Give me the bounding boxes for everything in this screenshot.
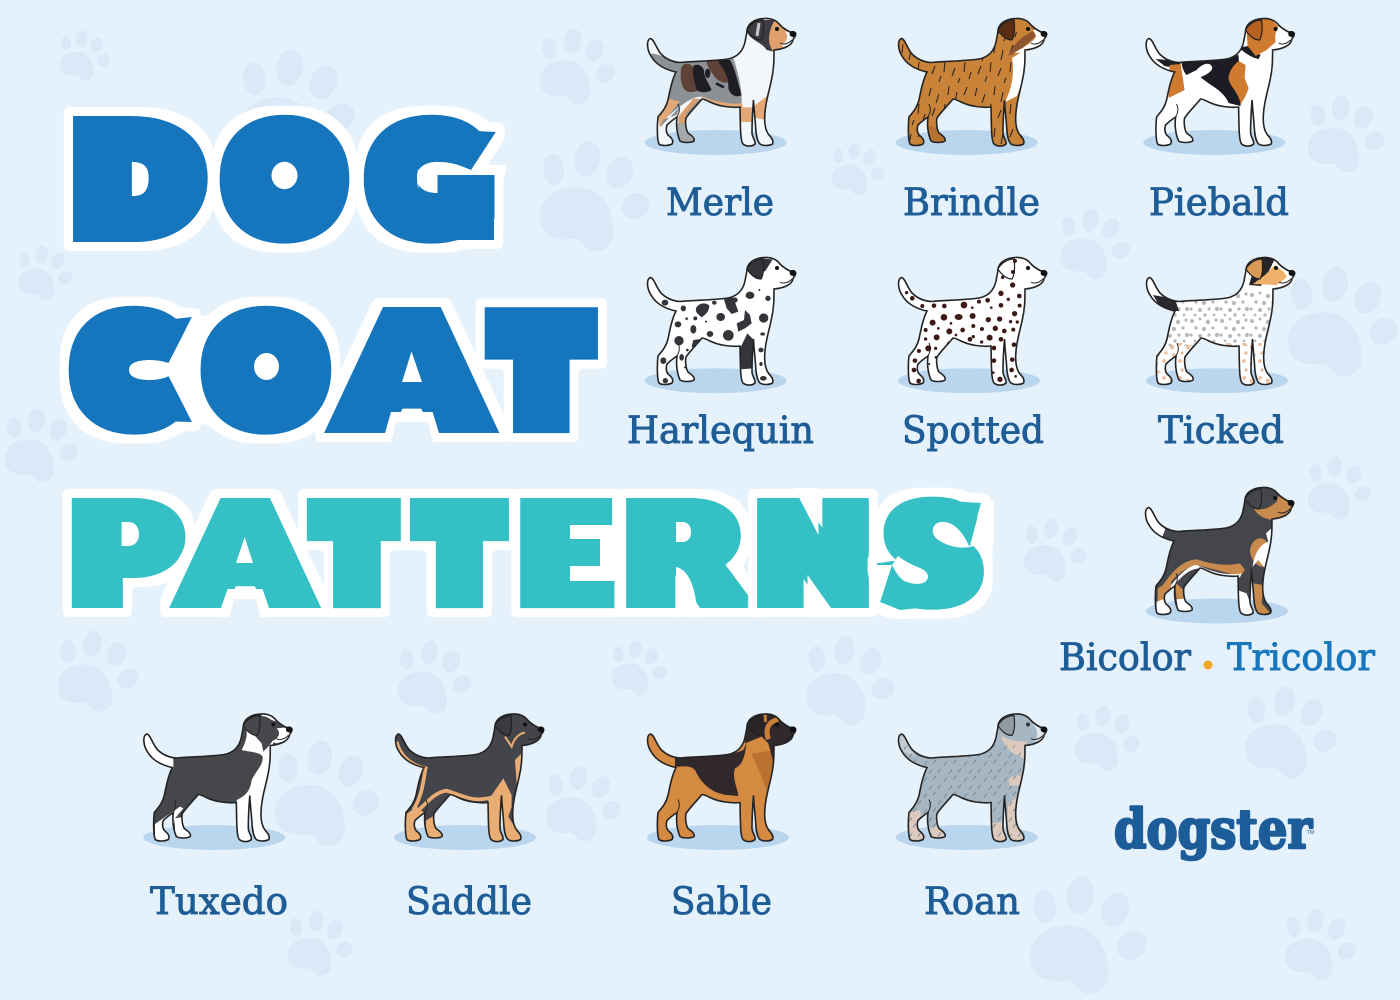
title word: PATTERNS: E — [528, 489, 604, 618]
label: Ticked: Ticked — [1158, 409, 1284, 452]
dog: merle — [643, 18, 797, 155]
title word: COAT: A — [348, 292, 476, 447]
logo: dogster: dogster — [1114, 797, 1312, 861]
title word: PATTERNS: N — [762, 484, 864, 623]
title word: PATTERNS: T — [321, 488, 393, 618]
title word: PATTERNS — [77, 483, 994, 623]
title word: DOG: O — [229, 101, 340, 257]
dog: sable — [647, 713, 797, 850]
label: Roan: Roan — [924, 880, 1020, 923]
title word: DOG — [80, 101, 512, 257]
title: DOG COAT PATTERNS — [77, 101, 994, 623]
title word: DOG: D — [80, 101, 197, 256]
dog: saddle — [394, 714, 544, 850]
dog: roan — [896, 714, 1050, 850]
title word: COAT: C — [79, 292, 183, 447]
dog: piebald — [1143, 16, 1295, 155]
dog: ticked — [1146, 257, 1295, 393]
label: Harlequin: Harlequin — [627, 409, 814, 452]
dog: brindle — [896, 18, 1048, 155]
title word: PATTERNS: R — [631, 485, 734, 622]
label: Piebald: Piebald — [1149, 181, 1289, 224]
title word: PATTERNS: T — [424, 488, 495, 618]
label: Spotted: Spotted — [902, 409, 1044, 452]
title word: DOG: G — [374, 102, 488, 257]
dog: harlequin — [645, 257, 796, 393]
label: Tricolor: Tricolor — [1227, 636, 1375, 679]
dog: tuxedo — [143, 714, 293, 850]
label: Tuxedo: Tuxedo — [150, 880, 288, 923]
dog: spotted — [898, 257, 1047, 393]
title word: PATTERNS: S — [889, 484, 976, 623]
logo: dogster: TM — [1307, 830, 1314, 836]
label: Saddle: Saddle — [406, 880, 532, 923]
title word: COAT: T — [502, 300, 580, 442]
title word: PATTERNS: P — [77, 483, 176, 622]
dog: bicolor / tricolor — [1143, 487, 1294, 624]
label: Brindle: Brindle — [903, 181, 1040, 224]
separator dot — [1204, 660, 1212, 670]
title word: PATTERNS: A — [188, 484, 303, 623]
title word: COAT: O — [210, 292, 322, 448]
label: Merle: Merle — [666, 181, 774, 224]
label: Bicolor: Bicolor — [1059, 636, 1191, 679]
label: Sable: Sable — [671, 880, 772, 923]
title word: COAT — [79, 292, 580, 448]
